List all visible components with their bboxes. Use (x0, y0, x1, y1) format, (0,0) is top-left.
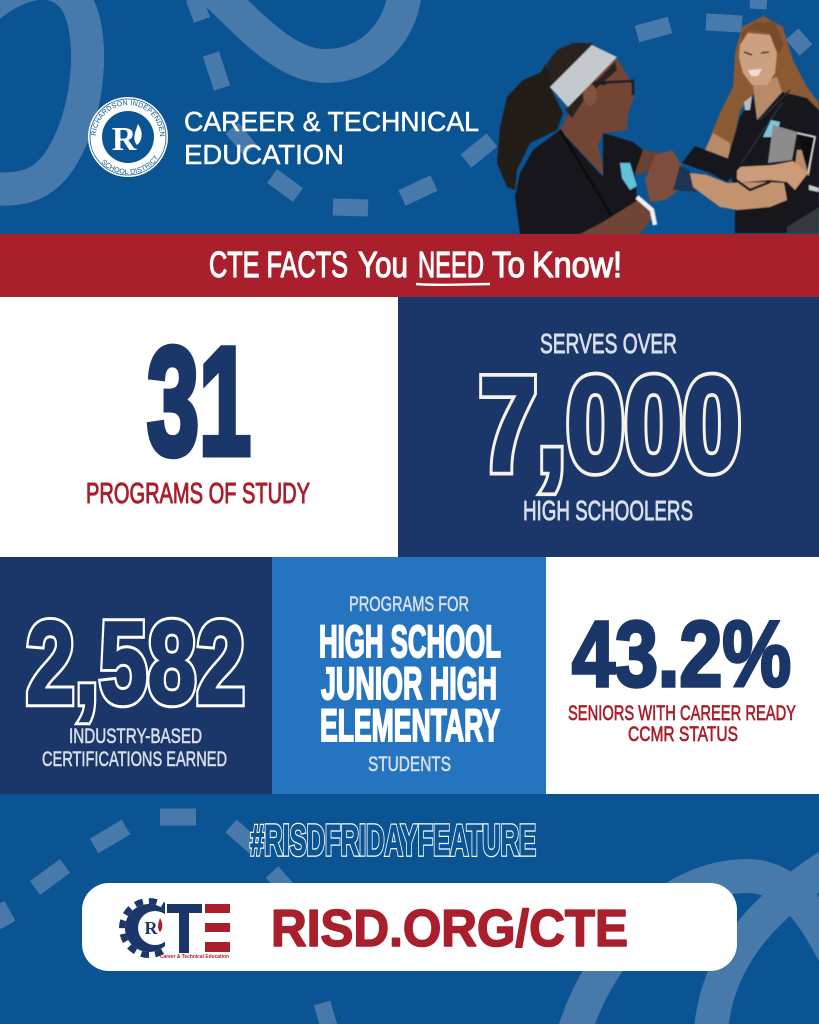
panel: 31 programs: PROGRAMS OF STUDY (86, 478, 310, 510)
panel: 31 programs: 31 (147, 316, 251, 487)
banner: Know! (532, 244, 622, 285)
panel: programs for grade levels: STUDENTS (368, 753, 451, 776)
logo: Richardson ISD seal (88, 97, 168, 177)
link pill (82, 883, 737, 971)
big number 2,582: 2,582 (26, 597, 245, 728)
header title: EDUCATION (184, 139, 344, 170)
panel: 7,000 high schoolers: HIGH SCHOOLERS (523, 495, 693, 526)
CTE logo: Career & Technical Education (160, 954, 230, 960)
photo prop: blood pressure cuff (673, 146, 743, 207)
panel: 2,582 certifications: INDUSTRY-BASED (69, 725, 202, 748)
header background (0, 0, 819, 234)
big number 7,000: 7,000 (479, 351, 741, 499)
panel: 31 programs (0, 297, 398, 557)
logo: Richardson ISD seal: SCHOOL DISTRICT (102, 154, 158, 174)
banner: To (492, 244, 525, 285)
photo figure: left student (497, 43, 685, 234)
link text: RISD.ORG/CTE (271, 900, 628, 958)
panel: 7,000 high schoolers: SERVES OVER (540, 328, 677, 359)
panel: programs for grade levels: HIGH SCHOOL (319, 616, 501, 667)
header title: CAREER & TECHNICAL (184, 106, 479, 137)
banner: NEED (418, 244, 484, 285)
footer background (0, 794, 819, 1024)
banner: You (358, 244, 408, 285)
panel: programs for grade levels: ELEMENTARY (320, 700, 500, 751)
logo: Richardson ISD seal: R (112, 121, 137, 158)
decorative road lines, bottom (0, 817, 819, 1024)
panel: 7,000 high schoolers (398, 297, 819, 557)
CTE logo (122, 892, 230, 964)
panel: programs for grade levels: JUNIOR HIGH (321, 658, 497, 709)
header title (184, 106, 479, 170)
panel: 43.2% seniors: CCMR STATUS (628, 723, 738, 746)
decorative road lines, top (0, 0, 806, 208)
photo: two students taking blood pressure (497, 16, 819, 234)
CTE logo: R (144, 918, 158, 938)
big number 7,000: 7,000 (479, 351, 741, 499)
hashtag: #RISDFRIDAYFEATURE (250, 816, 536, 865)
photo figure: right student (690, 16, 819, 233)
banner: CTE FACTS (209, 244, 348, 285)
panel: 2,582 certifications (0, 557, 272, 794)
hashtag: #RISDFRIDAYFEATURE (250, 816, 536, 865)
big number 2,582: 2,582 (26, 597, 245, 728)
hashtag (250, 816, 536, 865)
panel: 43.2% seniors (546, 557, 819, 794)
panel: 2,582 certifications: CERTIFICATIONS EARNED (42, 748, 227, 771)
panel: programs for grade levels (272, 557, 546, 794)
panel: programs for grade levels: PROGRAMS FOR (349, 593, 469, 616)
banner (0, 234, 819, 297)
